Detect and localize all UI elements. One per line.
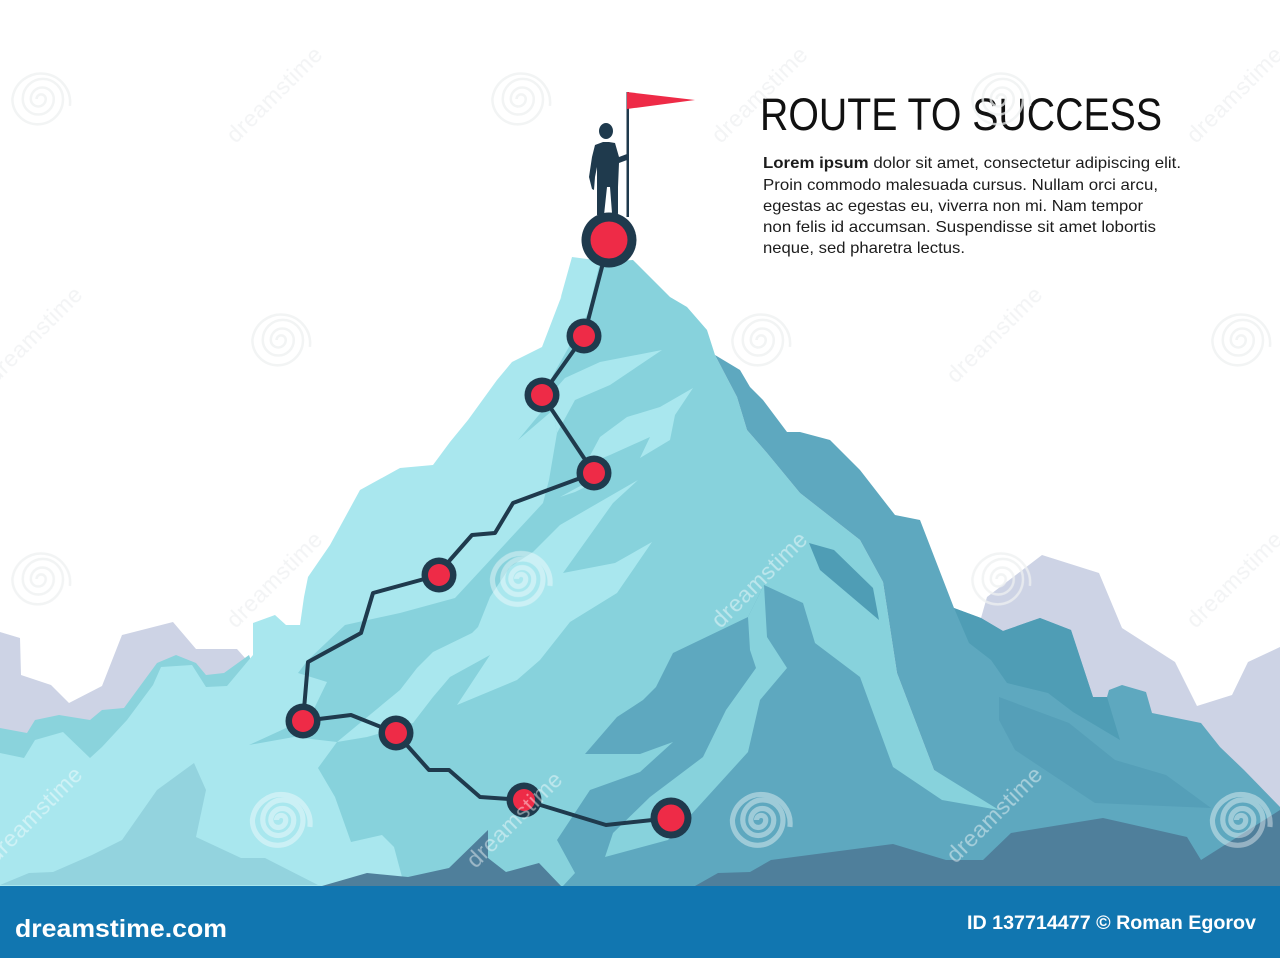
image credit: ID 137714477 © Roman Egorov	[967, 913, 1256, 934]
right lower shadow	[999, 697, 1211, 808]
watermark text: dreamstime	[941, 761, 1048, 868]
checkpoint 6	[576, 456, 612, 490]
lower left shade	[0, 763, 318, 885]
red flag	[627, 92, 695, 109]
checkpoint 5	[422, 558, 456, 592]
dark foreground left	[322, 830, 561, 886]
light left face	[0, 257, 620, 886]
body text: neque, sed pharetra lectus.	[763, 240, 965, 257]
summit checkpoint	[582, 212, 636, 268]
start checkpoint	[650, 798, 692, 838]
route path	[303, 240, 671, 825]
watermark text: dreamstime	[941, 281, 1048, 388]
flag pole	[626, 92, 629, 217]
body text: egestas ac egestas eu, viverra non mi. Nam tempor	[763, 198, 1144, 215]
mid tone body	[249, 260, 1005, 886]
body text: non felis id accumsan. Suspendisse sit amet lobortis	[763, 219, 1156, 236]
dark foreground right	[695, 810, 1280, 886]
body text	[763, 155, 1181, 257]
checkpoint 8	[566, 318, 602, 354]
checkpoint 7	[524, 378, 560, 412]
left distant range	[0, 622, 250, 760]
watermark text: dreamstime	[461, 281, 568, 388]
small ice wedge	[560, 480, 600, 497]
body text: Lorem ipsum dolor sit amet, consectetur adipiscing elit.	[763, 155, 1181, 172]
dark right ridge	[954, 608, 1120, 740]
long ice stripe	[337, 480, 652, 742]
checkpoint 2	[506, 782, 542, 818]
climber with flag	[589, 92, 695, 217]
watermark text: dreamstime	[706, 526, 813, 633]
lower ice stripe	[605, 585, 787, 857]
body text: Proin commodo malesuada cursus. Nullam orci arcu,	[763, 177, 1158, 194]
checkpoint 4	[286, 704, 320, 738]
second ice streak	[585, 388, 693, 465]
watermark text: dreamstime	[221, 526, 328, 633]
background mountains	[0, 555, 1280, 830]
site name: dreamstime.com	[15, 915, 227, 943]
upper ice streak	[550, 350, 662, 433]
footer band	[0, 886, 1280, 958]
title: ROUTE TO SUCCESS	[760, 89, 1162, 140]
main mountain	[0, 257, 1280, 886]
checkpoint 3	[378, 716, 414, 750]
watermark text: dreamstime	[221, 41, 328, 148]
climber silhouette	[589, 123, 629, 215]
right distant range	[981, 555, 1280, 830]
watermark spirals	[12, 73, 1270, 845]
watermark text: dreamstime	[706, 41, 813, 148]
watermark text: dreamstime	[461, 766, 568, 873]
left foothill ridge	[0, 655, 300, 800]
right shadow face	[557, 355, 1280, 886]
dark diamond crevice	[809, 543, 879, 620]
route line with checkpoints	[286, 212, 692, 838]
